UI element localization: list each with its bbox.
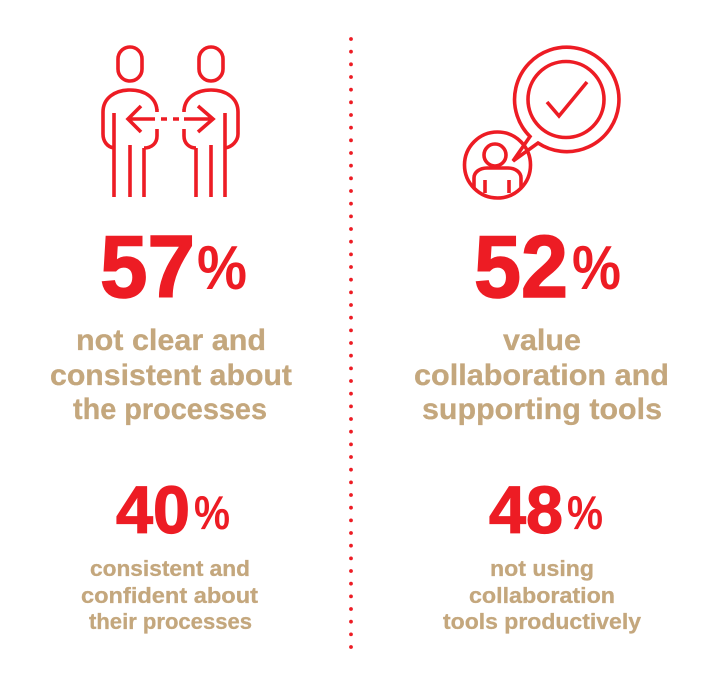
text: not clear and consistent about the processes <box>50 324 292 426</box>
stat: 48%: 48 <box>489 473 563 548</box>
text: value collaboration and supporting tools: supporting tools <box>422 393 662 426</box>
stat: 48% <box>489 473 603 548</box>
stat: 48%: % <box>567 486 603 539</box>
text: not clear and consistent about the processes: consistent about <box>50 359 292 392</box>
text: consistent and confident about their processes: consistent and <box>90 556 250 581</box>
text: not using collaboration tools productively: tools productively <box>443 609 641 634</box>
text: not using collaboration tools productively <box>443 556 641 634</box>
text: value collaboration and supporting tools: collaboration and <box>414 359 669 392</box>
stat: 52% <box>474 217 621 316</box>
text: consistent and confident about their processes: their processes <box>89 609 252 634</box>
stat: 57%: % <box>197 234 247 303</box>
text: value collaboration and supporting tools: value <box>503 324 581 357</box>
stat: 57%: 57 <box>100 217 195 316</box>
text: not clear and consistent about the processes: not clear and <box>76 324 266 357</box>
text: value collaboration and supporting tools <box>414 324 669 426</box>
stat: 52%: % <box>572 234 621 303</box>
text: consistent and confident about their processes: confident about <box>81 583 259 608</box>
text: not clear and consistent about the processes: the processes <box>73 393 267 426</box>
text: consistent and confident about their processes <box>81 556 259 634</box>
stat: 40%: % <box>194 486 230 539</box>
icon: two people with exchange arrows <box>103 47 238 197</box>
stat: 40% <box>116 473 230 548</box>
stat: 52%: 52 <box>474 217 568 316</box>
icon: person with check-mark speech bubble <box>464 47 619 198</box>
divider: dotted vertical line <box>349 39 353 648</box>
text: not using collaboration tools productively: collaboration <box>469 583 615 608</box>
stat: 57% <box>100 217 247 316</box>
stat: 40%: 40 <box>116 473 190 548</box>
text: not using collaboration tools productively: not using <box>490 556 594 581</box>
